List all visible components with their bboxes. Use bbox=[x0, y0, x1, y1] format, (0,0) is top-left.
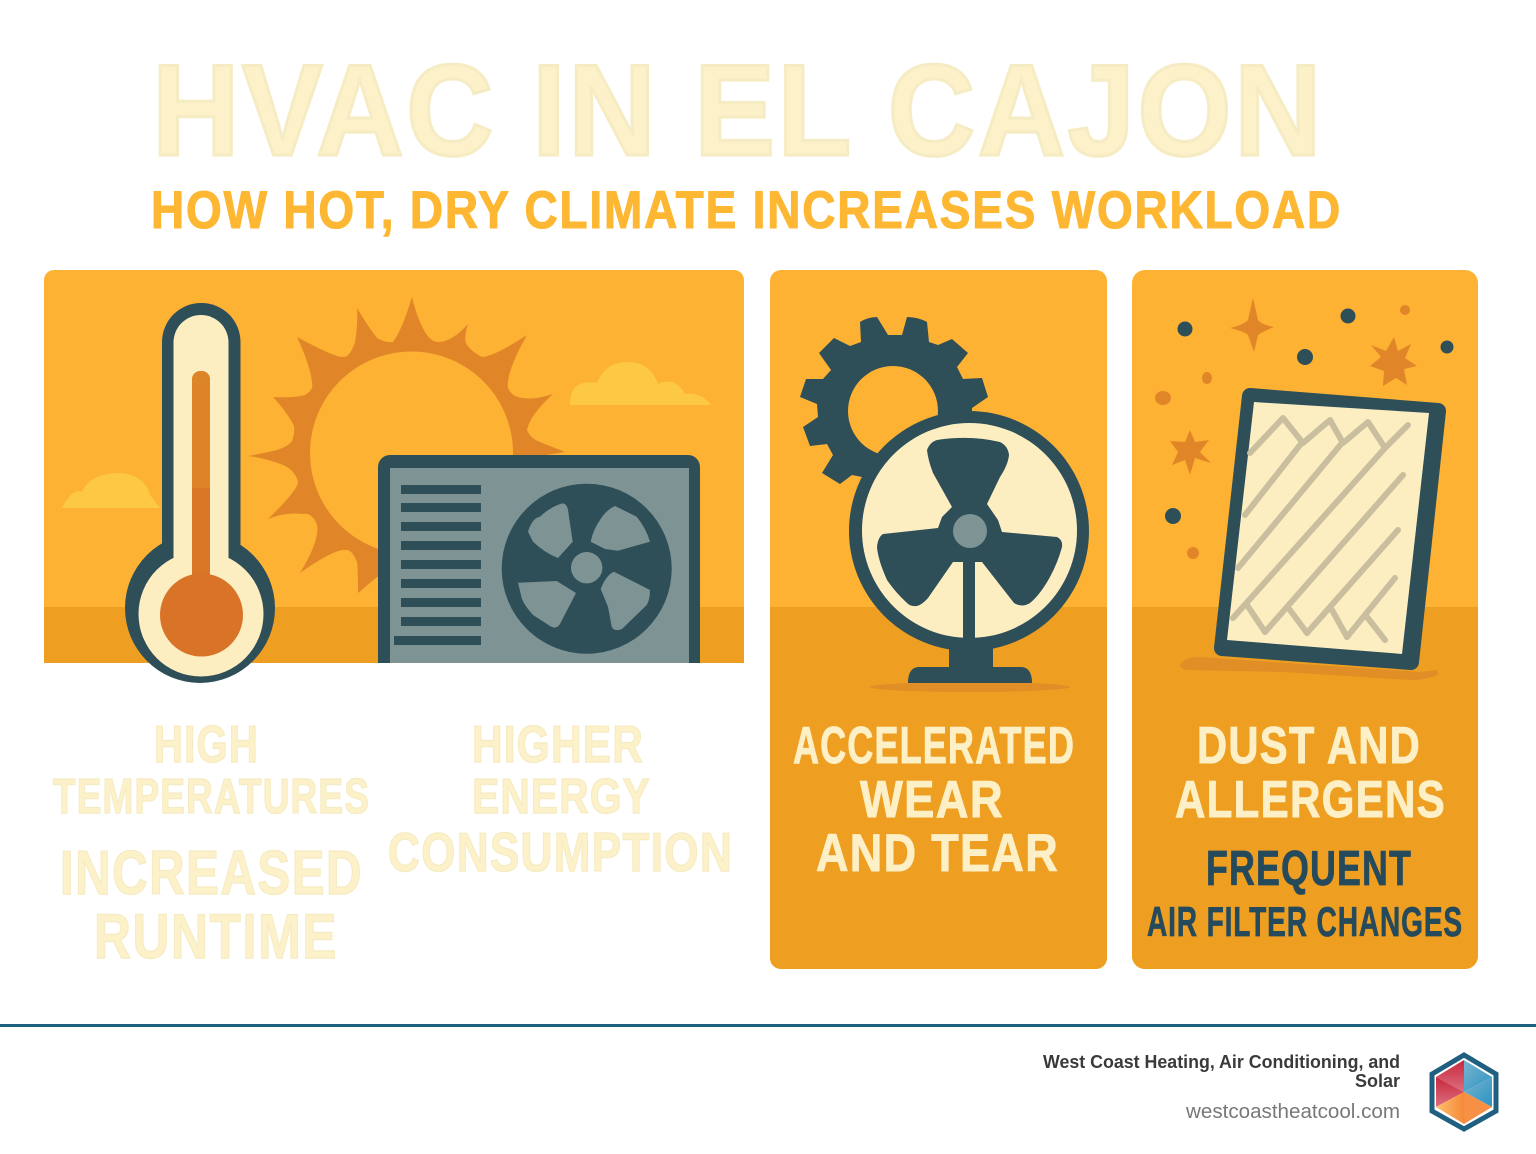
thermometer glass bbox=[174, 315, 228, 585]
fan hub bbox=[953, 514, 987, 548]
unit casing bbox=[378, 455, 700, 663]
label: increased: INCREASED bbox=[60, 839, 363, 908]
fan shadow bbox=[870, 682, 1070, 692]
louvers bbox=[394, 485, 481, 645]
sun disc bbox=[310, 352, 513, 554]
panel: wear and tear bbox=[770, 270, 1107, 969]
dark specks bbox=[1165, 308, 1454, 524]
subtitle: HOW HOT, DRY CLIMATE INCREASES WORKLOAD bbox=[151, 181, 1342, 240]
footer rule bbox=[0, 1024, 1536, 1027]
mercury bulb bbox=[160, 574, 243, 656]
icon: logo bbox=[1432, 1055, 1496, 1129]
label: energy: ENERGY bbox=[472, 770, 651, 824]
label: dust and allergens bbox=[1175, 717, 1446, 829]
ground band bbox=[1132, 607, 1478, 969]
fan blades bbox=[518, 503, 650, 630]
panel background bbox=[1132, 270, 1478, 969]
line 2: ALLERGENS bbox=[1175, 771, 1446, 829]
line 1: FREQUENT bbox=[1206, 842, 1412, 896]
panel background bbox=[770, 270, 1107, 969]
label: accelerated wear and tear bbox=[793, 717, 1075, 883]
unit face bbox=[390, 468, 689, 663]
dust specks bbox=[1155, 298, 1454, 559]
icon: desk fan bbox=[849, 411, 1089, 683]
filter frame bbox=[1222, 396, 1438, 662]
fan guard bbox=[849, 411, 1089, 651]
logo right bbox=[1464, 1077, 1492, 1107]
fan hub bbox=[571, 552, 602, 583]
labels: increased runtime bbox=[60, 839, 363, 972]
fan blades bbox=[877, 438, 1062, 606]
filter shadow bbox=[1180, 657, 1438, 680]
label: higher: HIGHER bbox=[472, 716, 644, 774]
labels: high temperatures bbox=[53, 716, 370, 824]
fan stem bbox=[963, 550, 975, 642]
icon: burst bbox=[1370, 337, 1417, 386]
filter sheet bbox=[1227, 402, 1429, 654]
thermometer casing bbox=[162, 303, 240, 583]
company name: West Coast Heating, Air Conditioning, and bbox=[1043, 1052, 1400, 1072]
line 3: AND TEAR bbox=[816, 824, 1059, 883]
icon: gear bbox=[800, 317, 988, 484]
icon: sun bbox=[248, 297, 565, 593]
filter pleats bbox=[1233, 418, 1408, 640]
icon: thermometer bbox=[125, 303, 275, 683]
line 1: ACCELERATED bbox=[793, 717, 1075, 775]
icon: AC unit bbox=[378, 455, 700, 663]
ground band bbox=[44, 607, 744, 663]
logo outline bbox=[1432, 1055, 1496, 1129]
line 2: WEAR bbox=[860, 771, 1004, 829]
logo bottom right bbox=[1464, 1092, 1492, 1124]
logo left bbox=[1436, 1077, 1464, 1107]
label: high: HIGH bbox=[154, 716, 259, 774]
logo top left bbox=[1436, 1060, 1464, 1092]
title: HVAC IN EL CAJON bbox=[152, 37, 1324, 183]
mercury tube bbox=[192, 371, 210, 601]
fan bbox=[502, 484, 672, 654]
logo top right bbox=[1464, 1060, 1492, 1092]
icon: sparkle bbox=[1230, 298, 1274, 352]
panel background bbox=[44, 270, 744, 663]
fan face bbox=[862, 423, 1077, 638]
label: frequent air filter changes bbox=[1147, 842, 1463, 945]
labels: higher energy consumption bbox=[388, 716, 733, 883]
icon: cloud left bbox=[62, 473, 160, 508]
icon: cloud right bbox=[570, 362, 711, 405]
orange specks bbox=[1155, 305, 1410, 559]
website: westcoastheatcool.com bbox=[1185, 1101, 1400, 1123]
fan disc bbox=[502, 484, 672, 654]
label: temperatures: TEMPERATURES bbox=[53, 770, 370, 824]
company name line 2: Solar bbox=[1355, 1071, 1400, 1091]
panel: high temperatures scene bbox=[44, 270, 744, 695]
footer bbox=[0, 1024, 1536, 1129]
label: runtime: RUNTIME bbox=[94, 902, 338, 972]
fan base bbox=[908, 640, 1032, 683]
icon: air filter bbox=[1222, 396, 1438, 662]
line 1: DUST AND bbox=[1197, 717, 1421, 775]
ground band bbox=[770, 607, 1107, 969]
icon: star bbox=[1170, 430, 1211, 475]
panel: dust and allergens bbox=[1132, 270, 1478, 969]
label: consumption: CONSUMPTION bbox=[388, 821, 733, 883]
logo bottom left bbox=[1436, 1092, 1464, 1124]
